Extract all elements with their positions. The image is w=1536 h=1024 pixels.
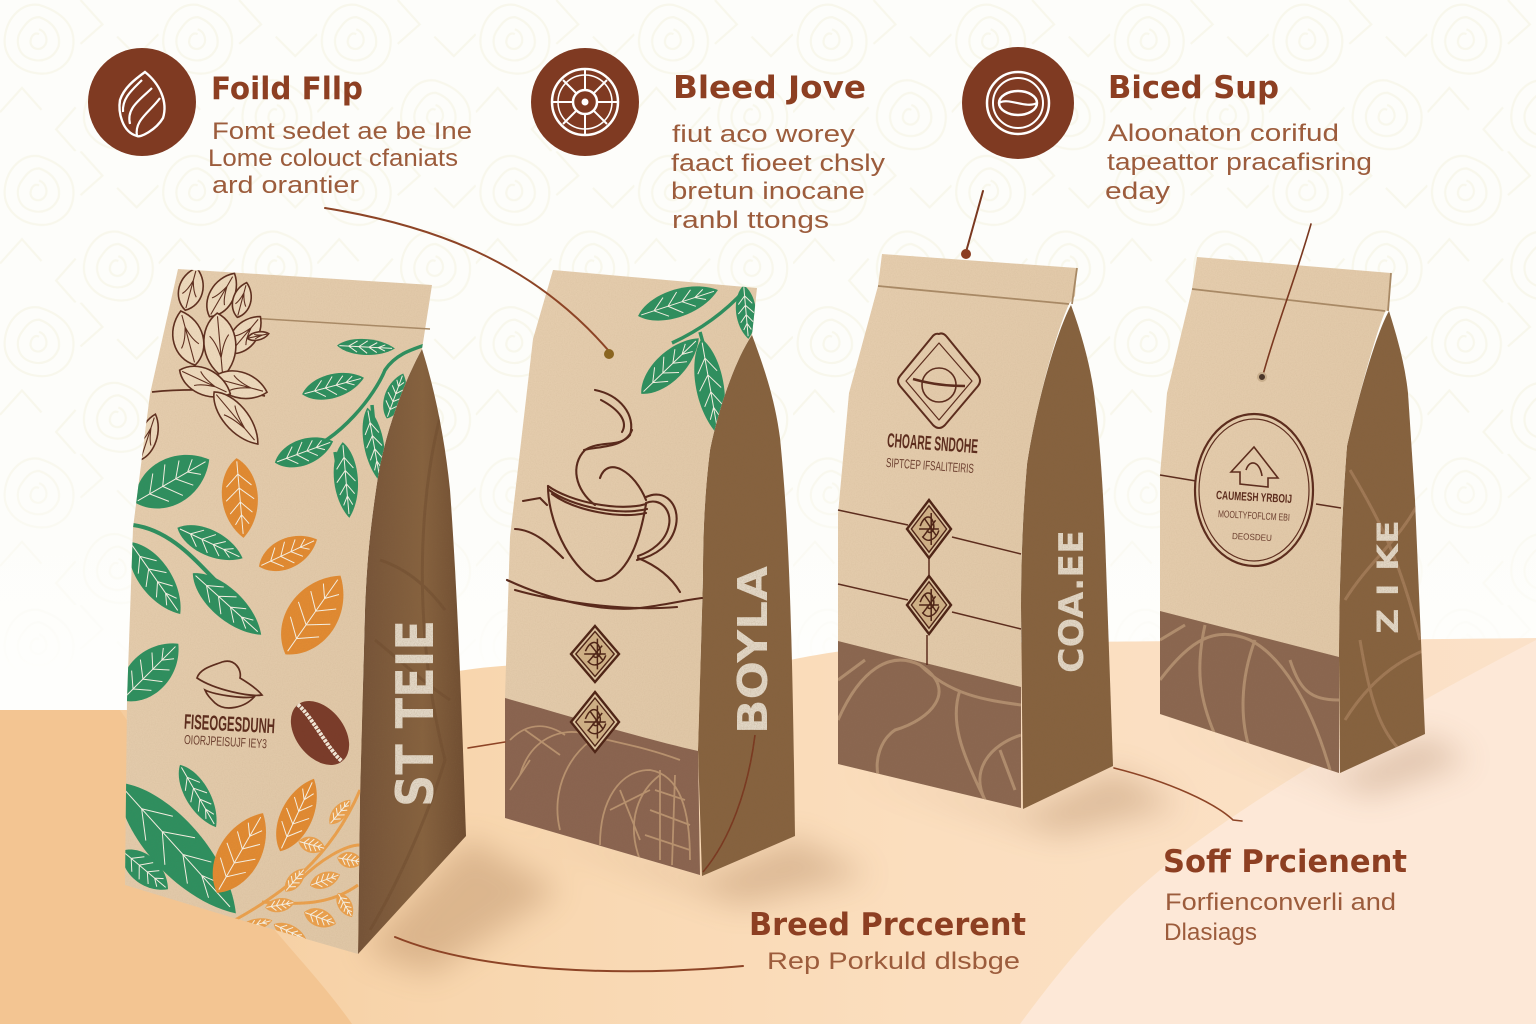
bag 3 top seal [878,268,1077,304]
bag 2 gusset [698,335,795,876]
heading: Soff Prcienent [1163,844,1407,880]
description [671,121,885,234]
bag 1 gusset [358,349,466,954]
description: faact fioeet chsly [671,150,885,177]
leader lines [325,191,1311,971]
description: Fomt sedet ae be Ine [212,118,472,145]
description: fiut aco worey [672,121,855,148]
bag 3 ornaments with lines [838,500,1021,665]
bag 1 side label: ST TEIE [386,620,446,807]
leader: bag 1 to bag 2 [468,742,505,748]
bag 4 round logo: DEOSDEU [1232,531,1272,543]
leader: feature 1 to bag 2 [325,208,614,359]
feature 5: lower right text [1163,844,1407,946]
feature 3: heading group [962,47,1372,205]
description: ard orantier [212,172,359,199]
description: Forfienconverli and [1165,889,1396,916]
feature 4: lower centre text [749,907,1026,975]
heading: Breed Prccerent [749,907,1026,943]
leader: bag 1 to feature 4 [395,937,743,971]
bag 1 orange leaves [212,458,344,893]
heading: Bleed Jove [673,70,866,106]
icon: bean rings badge [962,47,1074,159]
bag 2 leaf sprig [638,286,756,431]
description: Lome colouct cfaniats [208,145,458,172]
bag 1 line-art flower [142,270,270,460]
icon: wheel badge [531,48,639,156]
peach floor [0,638,1536,1024]
bag 4 bottom band [1160,611,1339,773]
description: Dlasiags [1164,919,1257,946]
feature 1: heading group [88,48,472,199]
bag 2 front panel [505,270,757,875]
bag 1 seal line [250,318,430,329]
bag 1 logo: FISEOGESDUNH [183,711,276,738]
bag 3 gusset [1021,305,1113,809]
description [1105,120,1372,205]
bag 4 front panel [1160,257,1391,773]
description [208,118,472,199]
description: eday [1105,178,1170,205]
leader: bag 4 pointer [1258,224,1311,381]
leader: feature 3 to bag 3 [961,191,983,259]
icon: leaf badge [88,48,196,156]
bag 4 gusset [1339,311,1425,773]
bag 3 front panel [838,254,1077,808]
bag 4 [1160,257,1425,773]
bag 1 front panel [125,269,432,954]
kraft grain texture [148,345,1398,905]
leader: bag 3 to feature 5 [1114,768,1242,821]
bag 3 side label: COA.EE [1052,530,1092,673]
bag 1 logo [183,661,276,751]
bag 4 top seal [1192,273,1391,311]
bag 2 side label: BOYLA [729,566,777,734]
description: Rep Porkuld dlsbge [767,948,1020,975]
bag 3 diamond logo: CHOARE SNDOHE [886,430,979,458]
bag 1 coffee bean [279,690,361,776]
description: Aloonaton corifud [1108,120,1339,147]
bag 2 coffee cup drawing [507,390,702,609]
description: bretun inocane [671,178,865,205]
bag 1 logo: OIORJPEISUJF IEY3 [184,732,267,751]
bag 3 diamond logo: SIPTCEP IFSALITEIRIS [886,455,975,476]
feature 2: heading group [531,48,885,234]
heading: Biced Sup [1108,70,1279,106]
bag 2 bottom band [505,698,700,875]
bag 2 ornaments [571,626,619,752]
description: tapeattor pracafisring [1107,149,1372,176]
bag 4 round logo: MOOLTYFOFLCM EBI [1218,509,1290,524]
description [1164,889,1396,946]
bag 1 [99,265,466,954]
bag 2 [505,270,795,876]
bag 4 round logo: CAUMESH YRBOIJ [1216,488,1292,506]
bag 3 [838,254,1113,809]
bag 3 diamond logo [886,333,980,476]
bag 4 side label: Z I KE [1371,520,1405,634]
bag shadows [362,716,1470,975]
bag 3 bottom band [838,641,1021,808]
bag 1 orange fronds [235,790,364,946]
bag 2 gusset line [703,735,755,872]
bag 4 round logo [1160,414,1341,566]
description: ranbl ttongs [672,207,829,234]
bag 1 green leaves [125,338,423,914]
heading: Foild Fllp [211,71,363,107]
